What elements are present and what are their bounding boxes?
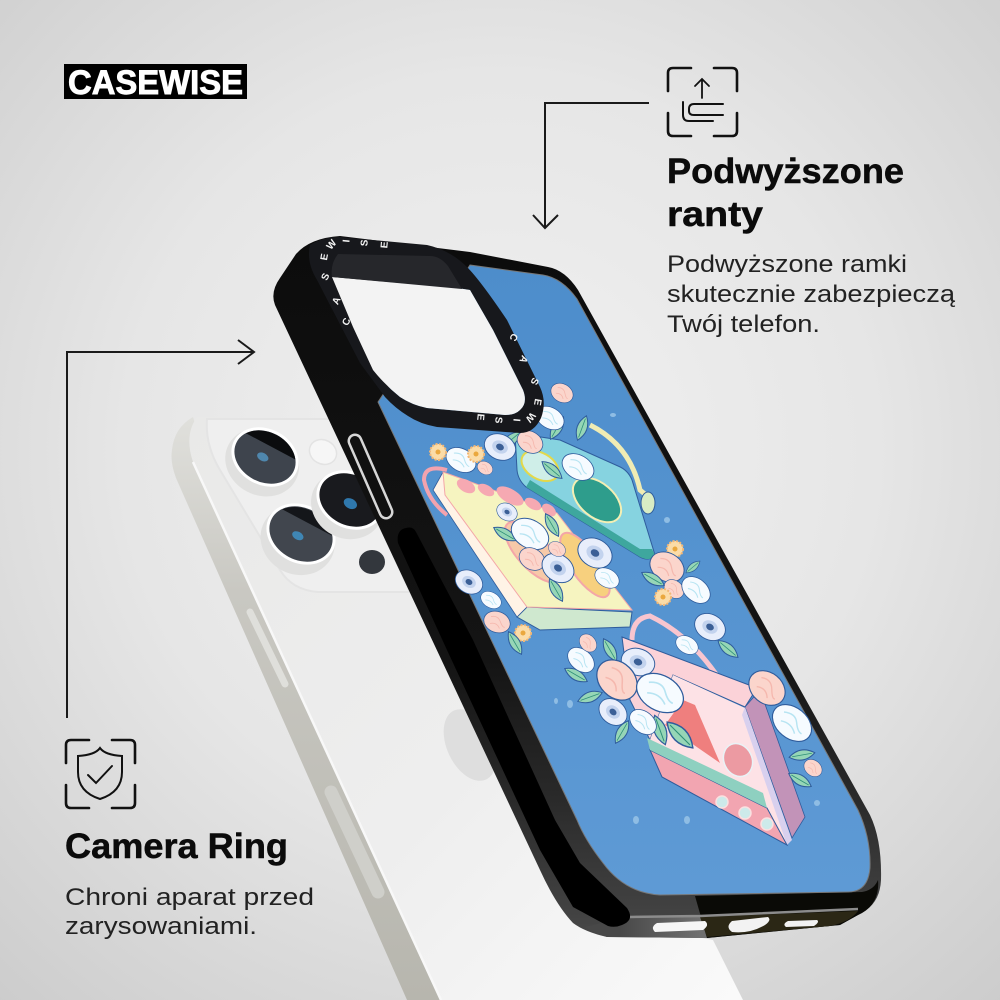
pink handle <box>632 616 722 687</box>
ring lettering: S <box>527 376 540 387</box>
console top <box>443 472 632 610</box>
pink lavender strip <box>742 707 792 845</box>
heading: Podwyższone ranty <box>667 152 904 234</box>
wall olive strip <box>700 911 858 937</box>
side button <box>355 441 386 512</box>
side slot <box>398 528 630 927</box>
bottom port: speaker <box>653 921 707 932</box>
text: camera ring description: zarysowaniami. <box>65 913 257 940</box>
ring lettering: I <box>341 239 353 243</box>
volume button <box>250 612 285 684</box>
heading: Camera Ring: Camera Ring <box>65 827 288 866</box>
radio speaker <box>565 469 629 531</box>
phone case <box>273 236 881 938</box>
console handle <box>424 468 447 515</box>
radio dial <box>516 445 564 487</box>
phone edge highlight <box>193 462 441 1000</box>
console pads <box>454 476 478 496</box>
pink top band <box>622 637 757 740</box>
teal radio <box>515 425 655 559</box>
ring lettering: E <box>531 398 543 407</box>
logo: CASEWISE: CASEWISE <box>68 64 243 102</box>
console side <box>517 607 632 630</box>
pink lower panel <box>650 750 787 845</box>
lens 2 <box>248 491 348 588</box>
phone side edge <box>172 417 445 1000</box>
power button <box>331 792 378 892</box>
screen with illustration <box>378 265 870 895</box>
lens 1 <box>213 414 312 509</box>
icon: shield <box>66 740 135 808</box>
ring lettering: C <box>506 331 520 343</box>
ring inner wall <box>332 254 462 289</box>
flash <box>305 435 341 469</box>
ring lettering: A <box>330 295 344 307</box>
text: camera ring description: Chroni aparat przed <box>65 884 314 911</box>
pink grille <box>665 700 720 763</box>
blue back panel <box>378 265 870 895</box>
case bottom wall right <box>695 880 878 938</box>
icon: raised edges <box>668 68 737 136</box>
heading: Podwyższone ranty: ranty <box>667 195 764 234</box>
ring lettering: I <box>510 418 522 422</box>
lens 3 <box>299 458 396 552</box>
pink face <box>650 675 787 845</box>
case bottom wall left <box>585 916 707 938</box>
pink mauve side <box>745 690 805 838</box>
heading: Podwyższone ranty: Podwyższone <box>667 152 904 191</box>
ring frame <box>309 237 544 433</box>
camera ring <box>309 237 544 433</box>
ring lettering: W <box>522 410 537 425</box>
ring lettering: E <box>379 241 391 249</box>
pink speaker <box>718 739 758 781</box>
white phone back <box>172 414 743 1000</box>
arrow: camera ring <box>67 340 254 718</box>
ring lettering: C <box>340 316 354 328</box>
case body <box>273 236 881 938</box>
bottom port: charge <box>728 917 769 932</box>
yellow console <box>424 468 632 630</box>
apple logo ghost <box>433 701 507 789</box>
ring hole <box>332 277 525 415</box>
ring lettering: S <box>492 416 504 424</box>
flowers <box>430 379 826 791</box>
camera plateau <box>207 419 410 592</box>
ring lettering: E <box>474 413 486 421</box>
ring lettering <box>319 237 543 425</box>
ring lettering: S <box>359 239 371 247</box>
pink knobs <box>716 796 728 808</box>
text: camera ring description <box>65 884 314 940</box>
background sparkles <box>554 413 820 824</box>
console stripes <box>496 513 570 591</box>
phone body <box>189 417 743 1000</box>
ring lettering: E <box>319 252 331 261</box>
radio body <box>515 433 655 559</box>
radio handle <box>590 425 652 500</box>
ring lettering: A <box>516 353 530 365</box>
text: raised edges description <box>667 251 956 338</box>
text: raised edges description: Podwyższone ramki <box>667 251 907 278</box>
text: raised edges description: skutecznie zabezpieczą <box>667 281 956 308</box>
bottom port: mic <box>784 920 818 927</box>
ring lettering: W <box>325 237 340 252</box>
wall light line <box>630 909 858 917</box>
sensor <box>359 550 385 574</box>
console cream edge <box>433 472 527 617</box>
ring lettering: S <box>320 271 333 282</box>
pink radio <box>622 616 805 845</box>
arrow: raised edges <box>533 103 649 228</box>
pink tape strip <box>647 738 767 808</box>
text: raised edges description: Twój telefon. <box>667 311 820 338</box>
